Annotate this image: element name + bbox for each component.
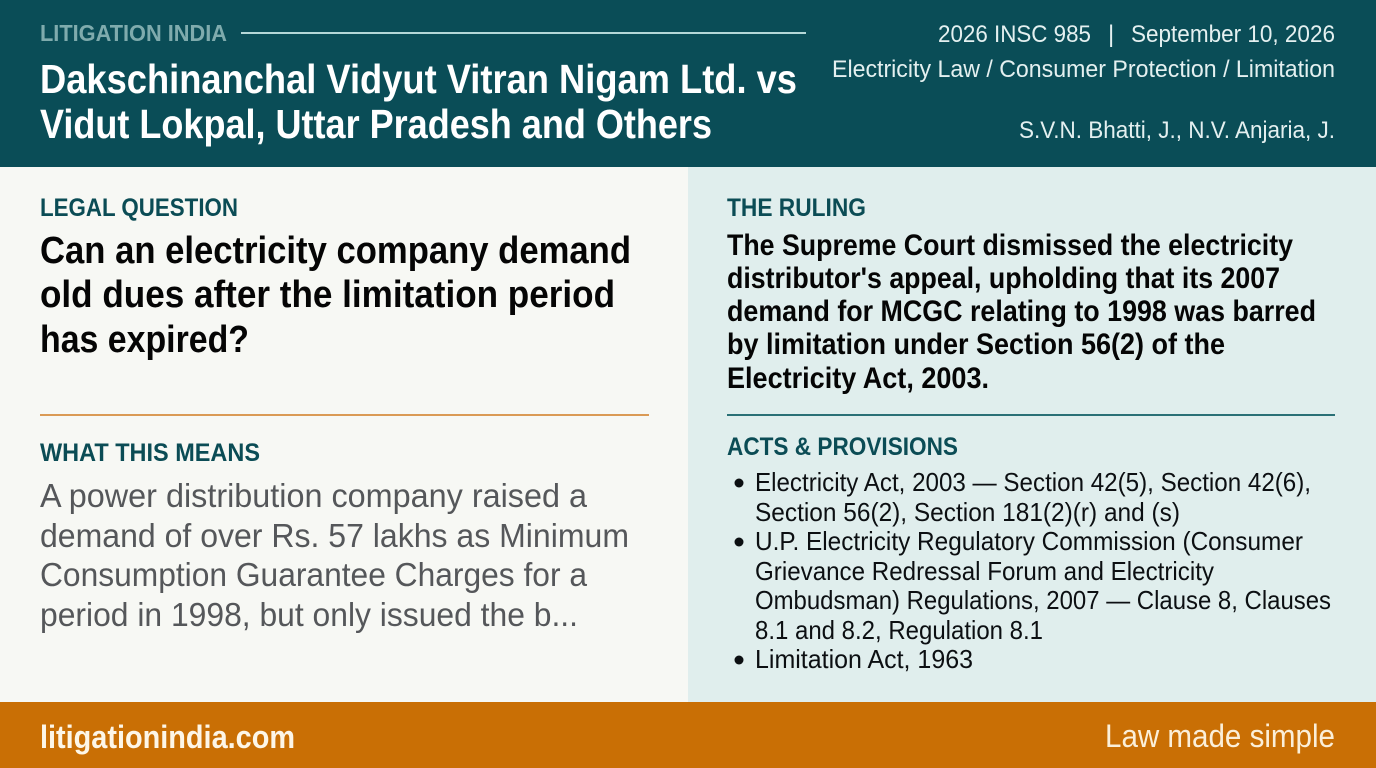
text block: explanation: A power distribution company raised a xyxy=(40,477,588,514)
website: litigationindia.com xyxy=(40,719,295,755)
text block: ruling: by limitation under Section 56(2) of the xyxy=(727,328,1225,361)
list: acts and provisions: Electricity Act, 2003 — Section 42(5), Section 42(6), xyxy=(755,467,1311,497)
text block: ruling xyxy=(727,229,1316,395)
title: Dakschinanchal Vidyut Vitran Nigam Ltd. vs xyxy=(40,56,797,102)
case citation and date: 2026 INSC 985 xyxy=(938,21,1091,48)
text block: explanation: period in 1998, but only issued the b... xyxy=(40,596,578,633)
footer band xyxy=(0,702,1376,768)
list: acts and provisions: Limitation Act, 1963 xyxy=(755,644,973,674)
list: acts and provisions: U.P. Electricity Regulatory Commission (Consumer xyxy=(755,526,1303,556)
heading: the ruling: THE RULING xyxy=(727,194,866,222)
heading: acts and provisions: ACTS & PROVISIONS xyxy=(727,433,958,461)
case citation and date: September 10, 2026 xyxy=(1131,21,1335,48)
list: acts and provisions: 8.1 and 8.2, Regulation 8.1 xyxy=(755,615,1043,645)
heading: what this means: WHAT THIS MEANS xyxy=(40,439,260,467)
list: acts and provisions xyxy=(734,467,1331,674)
text block: question: old dues after the limitation period xyxy=(40,274,615,316)
text block: ruling: Electricity Act, 2003. xyxy=(727,362,989,395)
case citation and date xyxy=(938,21,1335,48)
text block: explanation xyxy=(40,477,629,633)
text block: explanation: demand of over Rs. 57 lakhs as Minimum xyxy=(40,517,629,554)
text block: ruling: The Supreme Court dismissed the electricity xyxy=(727,229,1294,262)
list: acts and provisions: Grievance Redressal Forum and Electricity xyxy=(755,556,1214,586)
tagline: Law made simple xyxy=(1105,718,1335,754)
text block: ruling: demand for MCGC relating to 1998 was barred xyxy=(727,295,1316,328)
judges: S.V.N. Bhatti, J., N.V. Anjaria, J. xyxy=(1019,117,1335,144)
text block: question: has expired? xyxy=(40,319,249,361)
text block: question: Can an electricity company demand xyxy=(40,230,631,272)
title: Vidut Lokpal, Uttar Pradesh and Others xyxy=(40,101,712,147)
list: acts and provisions: Section 56(2), Section 181(2)(r) and (s) xyxy=(755,497,1180,527)
text block: question xyxy=(40,230,631,361)
panel: ruling and provisions xyxy=(688,167,1376,702)
text block: ruling: distributor's appeal, upholding that its 2007 xyxy=(727,262,1280,295)
list: acts and provisions: Ombudsman) Regulations, 2007 — Clause 8, Clauses xyxy=(755,585,1331,615)
brand label: LITIGATION INDIA xyxy=(40,20,227,46)
heading: legal question: LEGAL QUESTION xyxy=(40,194,238,222)
panel: legal question and what this means xyxy=(0,167,688,702)
subject areas: Electricity Law / Consumer Protection / Limitation xyxy=(832,56,1335,83)
header band xyxy=(0,0,1376,167)
case citation and date: | xyxy=(1108,21,1114,48)
text block: explanation: Consumption Guarantee Charges for a xyxy=(40,556,588,593)
title xyxy=(40,56,797,147)
